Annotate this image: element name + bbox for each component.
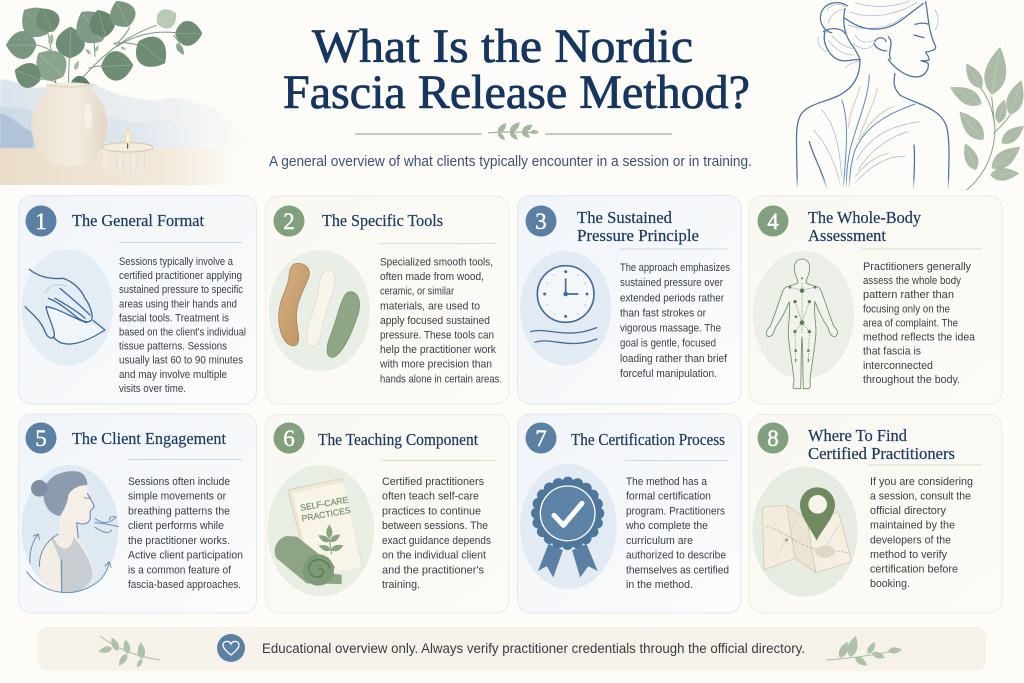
sprig: footer left	[98, 636, 160, 669]
panel: 1 the general format	[18, 196, 256, 404]
body text: certification before	[870, 563, 958, 575]
body text: vigorous massage. The	[620, 323, 721, 335]
body text: loading rather than brief	[620, 353, 727, 365]
heading: Certified Practitioners	[808, 444, 955, 463]
number badge 1	[26, 206, 56, 236]
title: What Is the Nordic	[312, 20, 693, 73]
body text: practices to continue	[382, 505, 481, 517]
body text: exact guidance depends	[382, 535, 491, 547]
body text: and the practitioner's	[382, 564, 484, 576]
body text: help the practitioner work	[380, 344, 497, 356]
body text: training.	[382, 579, 420, 591]
body text: ceramic, or similar	[380, 286, 454, 298]
icon: three smooth tools	[269, 250, 370, 371]
body text: areas using their hands and	[119, 298, 237, 310]
body text: usually last 60 to 90 minutes	[119, 355, 243, 367]
icon: self-care book and rolled mat: SELF-CARE	[299, 495, 349, 513]
body text: that fascia is	[863, 346, 921, 358]
body text: forceful manipulation.	[620, 368, 717, 380]
heading: Assessment	[808, 226, 886, 245]
number badge 5: 5	[35, 426, 47, 451]
body text: fascia-based approaches.	[128, 579, 241, 591]
body text: extended periods rather	[620, 292, 724, 304]
icon: heart badge	[217, 634, 245, 662]
body text	[863, 261, 975, 386]
body text	[379, 256, 502, 385]
body text: between sessions. The	[382, 520, 488, 532]
body text: booking.	[870, 578, 910, 590]
body text: focusing only on the	[863, 303, 950, 315]
body text	[128, 476, 243, 591]
body text: is a common feature of	[128, 564, 231, 576]
body text: often teach self-care	[382, 491, 479, 503]
body text: simple movements or	[128, 491, 226, 503]
body text: formal certification	[626, 491, 711, 503]
body text: throughout the body.	[863, 374, 960, 386]
heading: The Certification Process	[571, 430, 725, 449]
body text: certified practitioner applying	[119, 270, 242, 282]
heading: The General Format	[72, 211, 204, 230]
footer note: Educational overview only. Always verify practitioner credentials through the official directory.	[262, 641, 805, 656]
number badge 7	[526, 422, 556, 454]
body text: Practitioners generally	[863, 261, 972, 273]
panel: 8 where to find certified practitioners	[749, 414, 1002, 613]
body text: goal is gentle, focused	[620, 338, 716, 350]
heading: The Sustained	[577, 208, 673, 227]
body text: Sessions typically involve a	[119, 256, 233, 268]
heading	[808, 208, 922, 245]
body text: method reflects the idea	[863, 332, 975, 344]
body text: sustained pressure to specific	[119, 284, 244, 296]
body text: The method has a	[626, 476, 707, 488]
body text: The approach emphasizes	[620, 262, 730, 274]
body text: authorized to describe	[626, 550, 726, 562]
heading: The Whole-Body	[808, 208, 922, 227]
body text: visits over time.	[119, 383, 186, 395]
sprig: footer right	[826, 635, 902, 668]
icon: hand pressing on tissue	[22, 249, 113, 366]
body text: based on the client's individual	[119, 326, 246, 338]
body text: method to verify	[870, 549, 948, 561]
body text: curriculum are	[626, 535, 693, 547]
icon: self-care book and rolled mat	[267, 465, 374, 597]
body text	[625, 476, 729, 591]
panel: 5 the client engagement	[18, 414, 256, 613]
icon: self-care book and rolled mat: PRACTICES	[301, 505, 352, 523]
panel: 3 the sustained pressure principle	[518, 196, 741, 404]
body text: official directory	[870, 505, 947, 517]
body text: fascial tools. Treatment is	[119, 312, 229, 324]
body text: and may involve multiple	[119, 369, 227, 381]
body text: pattern rather than	[863, 289, 954, 301]
number badge 1: 1	[35, 209, 47, 234]
body text: If you are considering	[870, 476, 973, 488]
heading: Pressure Principle	[577, 226, 699, 245]
panel: 6 the teaching component	[266, 414, 509, 613]
number badge 4: 4	[767, 209, 779, 234]
body text	[119, 256, 246, 395]
body text: client performs while	[128, 520, 224, 532]
footer banner	[38, 627, 986, 671]
body text: apply focused sustained	[380, 315, 490, 327]
body text	[870, 476, 973, 590]
icon: clock and waves	[520, 251, 611, 366]
body text: themselves as certified	[626, 564, 729, 576]
number badge 3: 3	[535, 209, 547, 234]
number badge 3	[526, 206, 556, 236]
body text: often made from wood,	[380, 271, 484, 283]
icon: certification rosette	[520, 464, 617, 589]
number badge 2: 2	[283, 209, 295, 234]
heading	[577, 208, 699, 245]
body text: than fast strokes or	[620, 307, 706, 319]
title divider with sprig	[355, 120, 672, 142]
hair light strands	[818, 1, 938, 68]
number badge 5	[26, 422, 56, 454]
body text: in the method.	[626, 579, 693, 591]
body text: tissue patterns. Sessions	[119, 341, 227, 353]
panel: 4 the whole-body assessment	[749, 196, 1002, 404]
number badge 8: 8	[767, 426, 779, 451]
body text: assess the whole body	[863, 275, 962, 287]
number badge 8	[758, 422, 788, 454]
body text: area of complaint. The	[863, 318, 958, 330]
body text: Sessions often include	[128, 476, 230, 488]
body text: on the individual client	[382, 550, 486, 562]
number badge 2	[274, 206, 304, 236]
body text: sustained pressure over	[620, 277, 723, 289]
heading: The Specific Tools	[322, 211, 443, 230]
icon: body figure with connection points	[753, 251, 854, 389]
body text: Active client participation	[128, 550, 243, 562]
illustration: vase, eucalyptus and candle	[0, 0, 260, 185]
panel: 2 the specific tools	[266, 196, 509, 404]
body text	[382, 476, 491, 591]
heading: Where To Find	[808, 426, 908, 445]
body text: interconnected	[863, 360, 933, 372]
number badge 6: 6	[283, 426, 295, 451]
number badge 6	[274, 422, 304, 454]
body text	[620, 262, 730, 380]
body text: Specialized smooth tools,	[380, 256, 493, 268]
body text: maintained by the	[870, 520, 955, 532]
number badge 7: 7	[535, 426, 547, 451]
number badge 4	[758, 206, 788, 236]
title: Fascia Release Method?	[283, 66, 750, 119]
icon: breathing client profile	[22, 465, 118, 593]
body text: breathing patterns the	[128, 505, 230, 517]
subtitle: A general overview of what clients typically encounter in a session or in training.	[269, 153, 752, 170]
body text: hands alone in certain areas.	[380, 373, 502, 385]
heading: The Teaching Component	[318, 430, 478, 449]
body text: developers of the	[870, 534, 951, 546]
body text: materials, are used to	[380, 300, 480, 312]
body text: the practitioner works.	[128, 535, 230, 547]
body text: who complete the	[625, 520, 708, 532]
heading: The Client Engagement	[72, 429, 226, 448]
icon: map with location pin	[752, 467, 858, 597]
body text: pressure. These tools can	[380, 330, 494, 342]
title	[283, 20, 750, 119]
panel: 7 the certification process	[518, 414, 741, 613]
body text: with more precision than	[379, 359, 492, 371]
body text: Certified practitioners	[382, 476, 484, 488]
heading	[808, 426, 955, 463]
illustration: woman line art with fascia lines and leaves	[790, 1, 1024, 190]
body text: a session, consult the	[870, 491, 971, 503]
body text: program. Practitioners	[626, 505, 725, 517]
